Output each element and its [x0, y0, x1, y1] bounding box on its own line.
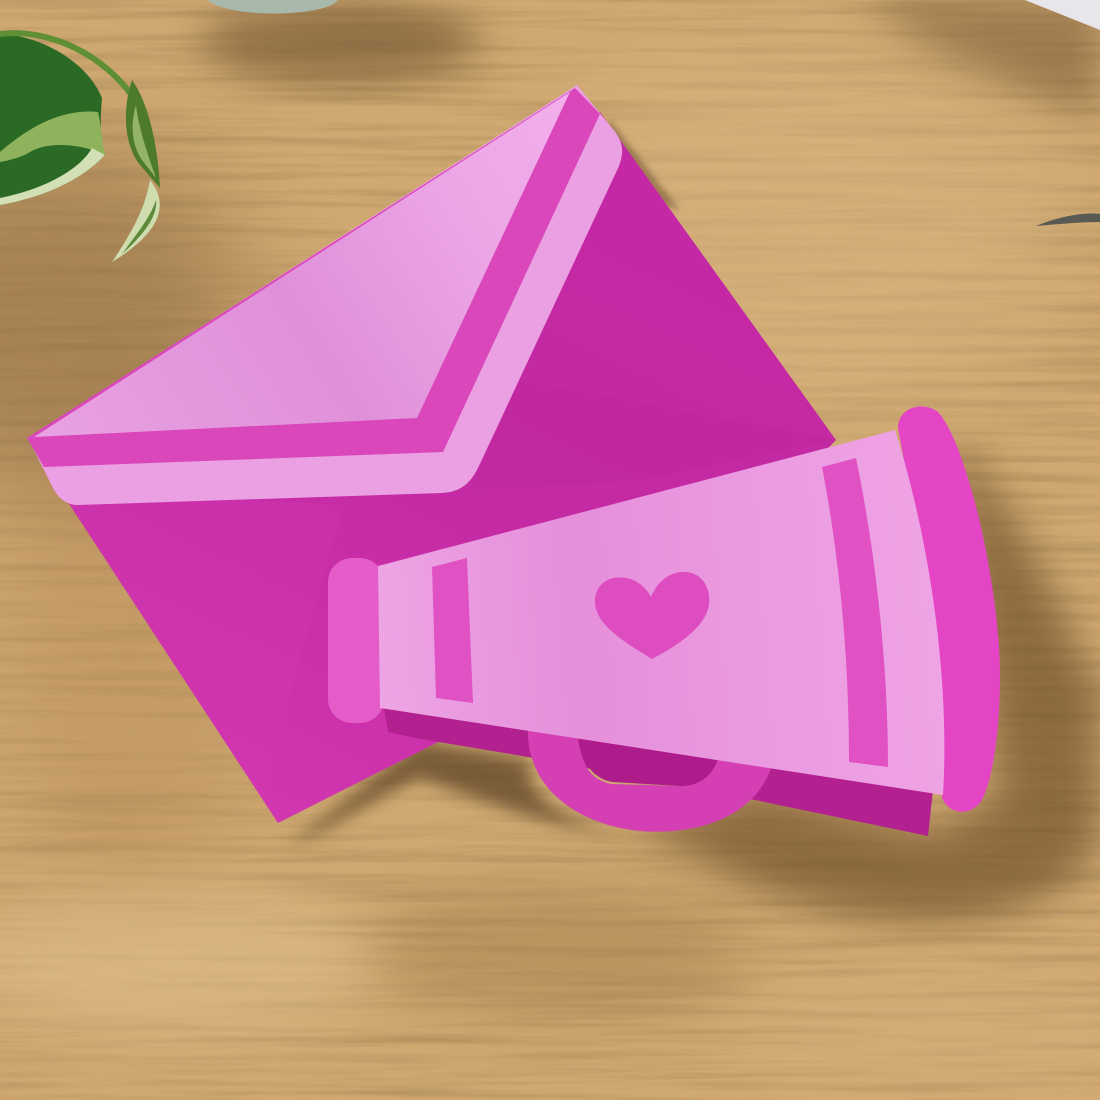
leaf: large	[0, 34, 105, 205]
cone body	[378, 430, 944, 795]
top pot edge	[208, 0, 338, 14]
plant sprig	[0, 33, 160, 262]
heart	[595, 572, 709, 659]
leaf: curled tip	[112, 180, 160, 262]
leaf: pale variegation	[0, 112, 105, 162]
stem	[0, 33, 135, 100]
flap outer strip	[28, 85, 622, 505]
envelope center shade	[470, 380, 836, 490]
envelope body	[60, 112, 836, 823]
handle inner opening	[578, 738, 718, 786]
shadow: top right	[860, 0, 1100, 120]
large band	[822, 458, 888, 767]
megaphone	[328, 406, 1000, 832]
envelope	[27, 85, 933, 836]
shadow: envelope on table	[288, 742, 640, 845]
leaf: narrow highlight	[133, 105, 156, 178]
bell	[898, 406, 1000, 812]
metal tip at right edge	[1036, 214, 1100, 226]
mouthpiece	[328, 558, 384, 723]
leaf: pale rim	[0, 148, 105, 205]
lower back sheet	[384, 708, 933, 836]
shadow: envelope upper edge	[600, 120, 680, 210]
flap inner sheet	[34, 92, 570, 437]
leaf: narrow	[126, 80, 160, 188]
handle	[528, 728, 771, 832]
top right keyboard corner	[1025, 0, 1100, 30]
flap middle band	[27, 88, 600, 467]
shadow: megaphone on table	[620, 430, 1100, 920]
leaf: curled tip shade	[122, 200, 156, 254]
small band	[432, 558, 473, 703]
envelope lower-left panel	[60, 490, 345, 823]
shadow: top object	[200, 2, 480, 82]
